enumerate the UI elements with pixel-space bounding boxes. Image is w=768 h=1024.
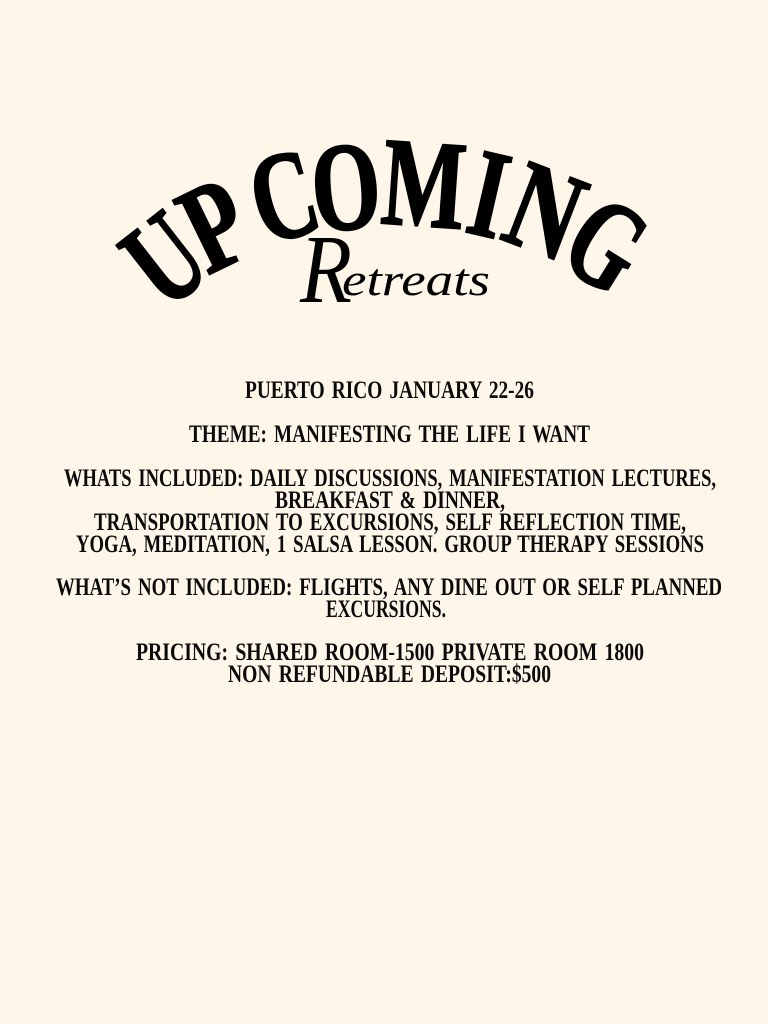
- title: Upcoming: U: [96, 184, 232, 334]
- title: Upcoming: [96, 111, 671, 334]
- title: Upcoming: I: [457, 122, 522, 266]
- text block: event details: [56, 377, 722, 688]
- title: Upcoming: N: [488, 134, 603, 289]
- title: Upcoming: C: [235, 120, 333, 272]
- text block: event details: EXCURSIONS.: [326, 596, 446, 623]
- text block: event details: BREAKFAST & DINNER,: [275, 487, 505, 514]
- text block: event details: NON REFUNDABLE DEPOSIT:$500: [228, 661, 551, 688]
- text block: event details: PRICING: SHARED ROOM-1500 PRIVATE ROOM 1800: [136, 639, 644, 666]
- subtitle: Retreats: etreats: [342, 254, 490, 305]
- text block: event details: PUERTO RICO JANUARY 22-26: [245, 377, 534, 404]
- title: Upcoming: G: [541, 168, 671, 321]
- title: Upcoming: M: [378, 111, 471, 257]
- subtitle: Retreats: R: [299, 216, 352, 324]
- subtitle: Retreats: [299, 216, 490, 324]
- title: Upcoming: O: [306, 114, 386, 260]
- title: Upcoming: P: [158, 149, 271, 300]
- text block: event details: THEME: MANIFESTING THE LIFE I WANT: [189, 421, 590, 448]
